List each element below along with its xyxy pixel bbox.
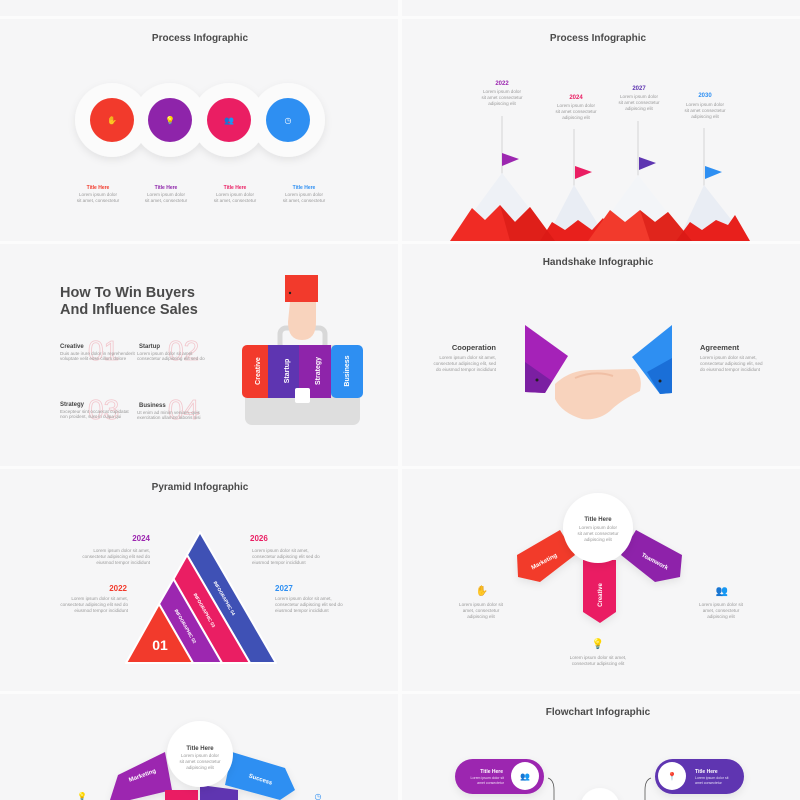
band labels: 01 (152, 637, 168, 653)
left pill: Lorem ipsum dolor sit (471, 776, 504, 780)
colored circles (90, 98, 310, 142)
captions (77, 185, 326, 203)
right pill: Title Here (695, 769, 718, 775)
items: exercitation ullamco laboris nisi (137, 415, 201, 420)
panel: handshake: do eiusmod tempor incididunt (436, 367, 497, 372)
right pill: amet consectetur (695, 781, 723, 785)
briefcase: Business (344, 355, 351, 387)
items: Creative (60, 344, 84, 350)
year labels: adipiscing elit (691, 114, 720, 119)
year labels: 2027 (632, 86, 646, 92)
left pill: 👥 (520, 772, 530, 781)
captions: sit amet, consectetur (145, 198, 188, 203)
year labels: 2024 (569, 95, 583, 101)
left pill (455, 759, 544, 794)
icons and notes: Lorem ipsum dolor sit (459, 602, 504, 607)
briefcase: Strategy (315, 357, 322, 385)
poles and flags (502, 116, 704, 186)
items: Strategy (60, 402, 85, 408)
year labels: sit amet consectetur (481, 95, 523, 100)
panel: handshake: Lorem ipsum dolor sit amet, (700, 355, 757, 360)
year labels: Lorem ipsum dolor (620, 94, 658, 99)
briefcase: Creative (255, 357, 262, 385)
items: Duis aute irure dolor in reprehenderit (60, 351, 136, 356)
band labels: INFOGRAPHIC 04 (212, 580, 236, 617)
year labels: 2024 (132, 534, 151, 543)
title: Process Infographic (152, 33, 249, 44)
year labels: 2026 (250, 534, 268, 543)
band labels: INFOGRAPHIC 02 (173, 608, 197, 645)
panel: handshake: consectetur adipiscing elit, sed (433, 361, 496, 366)
panel: arrows diagram: Lorem ipsum dolor (579, 525, 617, 530)
panel: win buyers: And Influence Sales (60, 302, 198, 318)
big faded numbers: 02 (168, 335, 199, 366)
items (60, 344, 205, 420)
items: Business (139, 403, 166, 409)
title: Pyramid Infographic (152, 482, 249, 493)
hand (285, 275, 318, 302)
year labels: adipiscing elit (488, 101, 517, 106)
items: Startup (139, 344, 160, 350)
panel: pyramid: eiusmod tempor incididunt (252, 560, 306, 565)
year labels (109, 534, 293, 593)
panel: arrows diagram: Teamwork (640, 553, 669, 572)
panel: bottom-left partial diagram: Title Here (186, 746, 214, 752)
ring circles (75, 83, 325, 157)
panel: mountains (450, 33, 750, 241)
panel: pyramid: eiusmod tempor incididunt (96, 560, 151, 565)
briefcase: Startup (284, 359, 291, 383)
right pill: Lorem ipsum dolor sit (695, 776, 728, 780)
panel: pyramid: consectetur adipiscing elit sed do (82, 554, 150, 559)
panel: pyramid: eiusmod tempor incididunt (275, 608, 329, 613)
pyramid bands (126, 532, 276, 663)
year labels: Lorem ipsum dolor (686, 102, 724, 107)
year labels: sit amet consectetur (555, 109, 597, 114)
panel: arrows diagram: adipiscing elit (584, 537, 613, 542)
panel: arrows diagram (459, 493, 744, 666)
arrows (517, 530, 682, 623)
labels: Cooperation (452, 343, 496, 352)
panel: pyramid: Lorem ipsum dolor sit amet, (93, 548, 150, 553)
year labels: 2022 (495, 81, 509, 87)
band labels: INFOGRAPHIC 03 (192, 592, 216, 629)
icons and notes: amet, consectetur (703, 608, 740, 613)
year labels: Lorem ipsum dolor (557, 103, 595, 108)
icons and notes: Lorem ipsum dolor sit (699, 602, 744, 607)
year labels: 2027 (275, 584, 293, 593)
heading: How To Win Buyers (60, 285, 195, 301)
big faded numbers (88, 335, 199, 425)
colored circles: 👥 (224, 116, 234, 125)
items: voluptate velit esse cillum dolore (60, 356, 127, 361)
right pill (655, 759, 744, 794)
icons and notes: consectetur adipiscing elit (572, 661, 625, 666)
title: Flowchart Infographic (546, 707, 651, 718)
left pill: Title Here (480, 769, 503, 775)
icons and notes: Lorem ipsum dolor sit amet, (570, 655, 626, 660)
briefcase (242, 275, 363, 425)
colored circles: 💡 (165, 115, 175, 125)
panel: bottom-left partial diagram (77, 721, 322, 800)
title: Process Infographic (550, 33, 647, 44)
big faded numbers: 03 (88, 394, 119, 425)
panel: win buyers (60, 275, 363, 425)
colored circles: ◷ (285, 116, 292, 125)
icons and notes (459, 584, 744, 666)
panel: pyramid: Lorem ipsum dolor sit amet, (275, 596, 332, 601)
icons and notes: adipiscing elit (707, 614, 736, 619)
items: consectetur adipiscing elit sed do (137, 356, 205, 361)
panel: arrows diagram: Creative (598, 582, 604, 607)
captions: Title Here (155, 185, 178, 191)
band labels (152, 580, 236, 653)
items: Excepteur sint occaecat cupidatat (60, 409, 129, 414)
captions: Title Here (293, 185, 316, 191)
year labels: sit amet consectetur (618, 100, 660, 105)
year labels: 2030 (698, 93, 712, 99)
panel: pyramid (60, 482, 343, 663)
panel: process circles (75, 33, 326, 203)
labels (452, 343, 740, 352)
big faded numbers: 01 (88, 335, 119, 366)
year labels: sit amet consectetur (684, 108, 726, 113)
panel: bottom-left partial diagram: Marketing (128, 768, 157, 784)
panel: arrows diagram: Title Here (584, 517, 612, 523)
mountains (450, 173, 750, 241)
items: Ut enim ad minim veniam, quis (137, 410, 201, 415)
panel: handshake (433, 257, 763, 419)
panel: handshake: consectetur adipiscing elit, sed (700, 361, 763, 366)
panel: pyramid: consectetur adipiscing elit sed do (275, 602, 343, 607)
panel: arrows diagram: sit amet consectetur (577, 531, 619, 536)
year labels (481, 81, 726, 120)
panel: pyramid: consectetur adipiscing elit sed do (60, 602, 128, 607)
icons and notes: 💡 (592, 637, 604, 650)
panel: handshake: do eiusmod tempor incididunt (700, 367, 761, 372)
captions: Title Here (87, 185, 110, 191)
panel: bottom-left partial diagram: Lorem ipsum dolor (181, 753, 219, 758)
panel: bottom-left partial diagram: adipiscing elit (186, 765, 215, 770)
panel: pyramid: eiusmod tempor incididunt (74, 608, 129, 613)
labels: Agreement (700, 343, 740, 352)
icons and notes: 👥 (716, 586, 728, 597)
panel: handshake: Lorem ipsum dolor sit amet, (439, 355, 496, 360)
year labels: Lorem ipsum dolor (483, 89, 521, 94)
captions: sit amet, consectetur (283, 198, 326, 203)
left pill: amet consectetur (477, 781, 505, 785)
items: Lorem ipsum dolor sit amet (137, 351, 193, 356)
right pill: 📍 (667, 771, 677, 781)
panel: arrows diagram: Marketing (531, 553, 559, 571)
icons and notes: amet, consectetur (463, 608, 500, 613)
icons and notes: adipiscing elit (467, 614, 496, 619)
year labels: adipiscing elit (625, 106, 654, 111)
title: Handshake Infographic (543, 257, 654, 268)
handshake graphic (525, 325, 672, 419)
panel: flowchart (455, 707, 744, 800)
captions: Title Here (224, 185, 247, 191)
items: non proident, sunt in culpa qui (60, 414, 121, 419)
year labels: adipiscing elit (562, 115, 591, 120)
connectors (548, 778, 651, 800)
captions: Lorem ipsum dolor (79, 192, 117, 197)
panel: pyramid: Lorem ipsum dolor sit amet, (252, 548, 309, 553)
center circle (563, 493, 633, 563)
captions: sit amet, consectetur (214, 198, 257, 203)
year labels: 2022 (109, 584, 128, 593)
captions: Lorem ipsum dolor (147, 192, 185, 197)
colored circles: ✋ (107, 115, 117, 125)
captions: Lorem ipsum dolor (216, 192, 254, 197)
panel: pyramid: consectetur adipiscing elit sed do (252, 554, 320, 559)
icons and notes: ✋ (476, 584, 488, 597)
panel: bottom-left partial diagram: Success (248, 773, 273, 787)
captions: sit amet, consectetur (77, 198, 120, 203)
big faded numbers: 04 (168, 394, 199, 425)
panel: pyramid: Lorem ipsum dolor sit amet, (71, 596, 128, 601)
panel: bottom-left partial diagram: sit amet consectetur (179, 759, 221, 764)
captions: Lorem ipsum dolor (285, 192, 323, 197)
